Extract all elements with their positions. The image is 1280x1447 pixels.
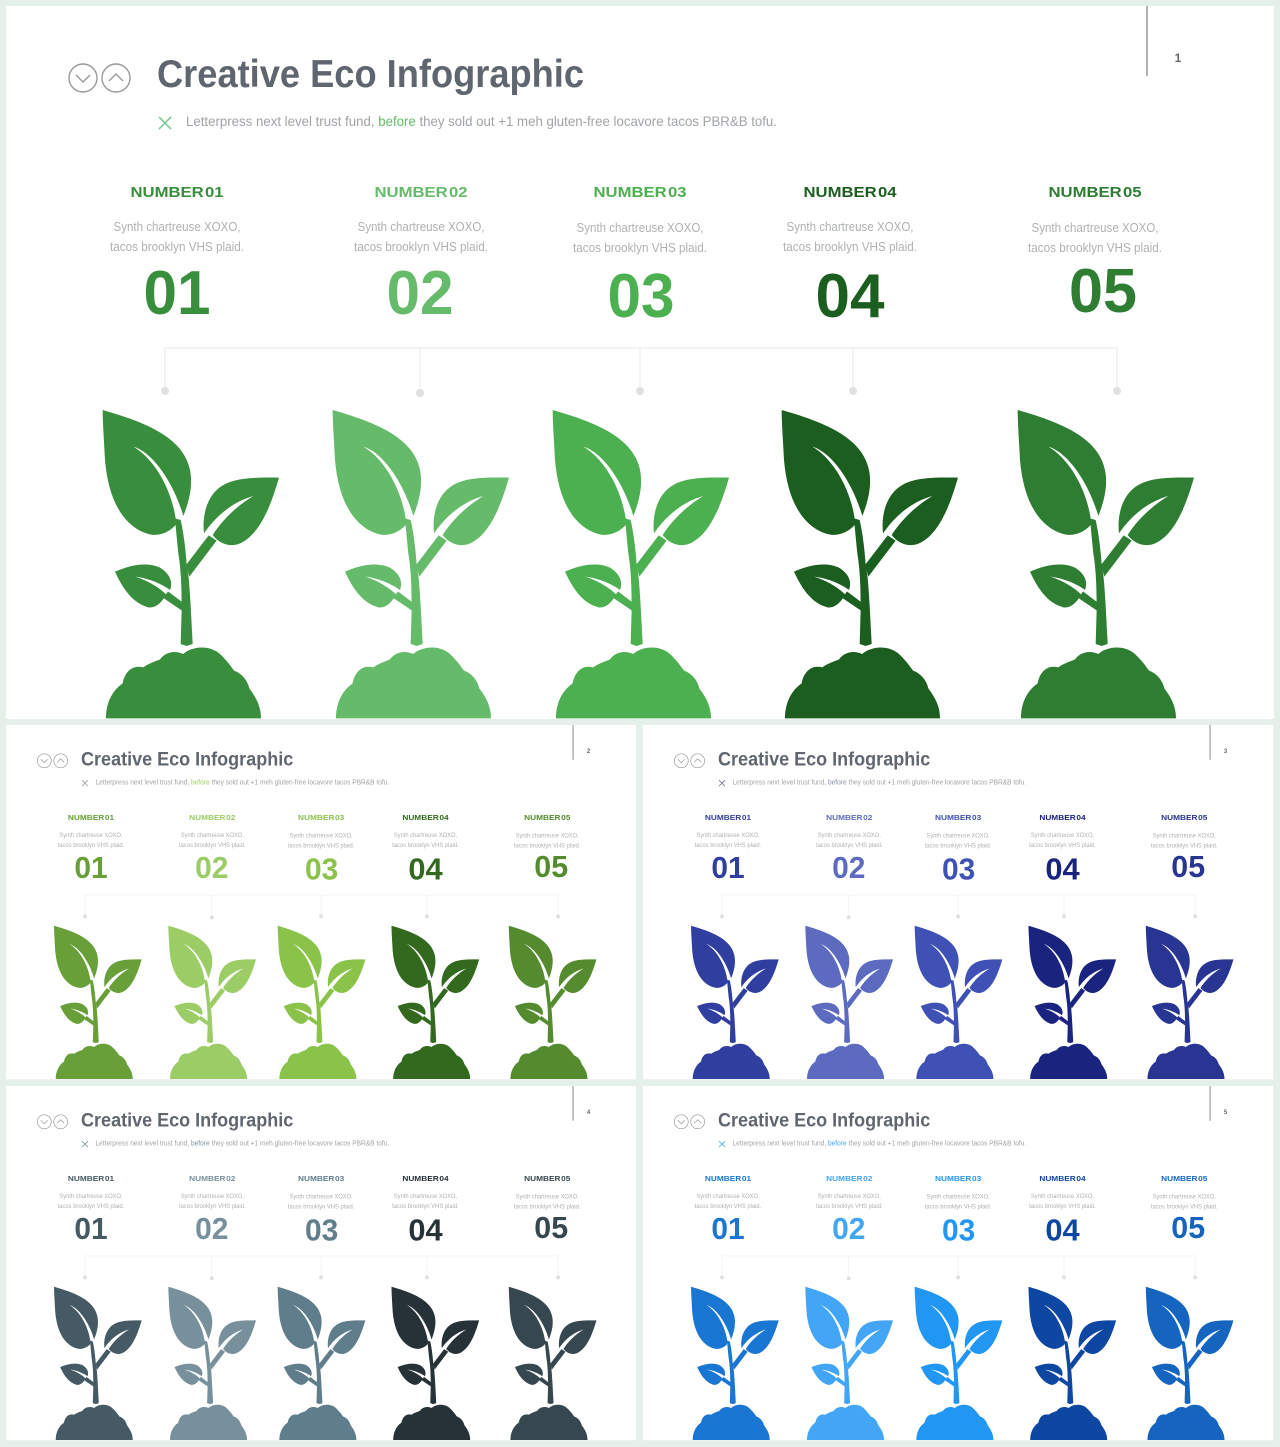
- column 4 text: NUMBER 04: [1039, 813, 1087, 822]
- column 2 text: NUMBER 02: [826, 813, 872, 822]
- column 3 text: NUMBER 03: [594, 184, 686, 201]
- column 5 text: Synth chartreuse XOXO,: [1153, 1193, 1216, 1200]
- column 4 text: NUMBER 04: [402, 813, 450, 822]
- panel: indigo slide: [643, 725, 1273, 1079]
- subtitle: Letterpress next level trust fund, before they sold out +1 meh gluten-free locavore tacos PBR&B tofu.: [186, 113, 777, 129]
- column 1 text: 01: [711, 1211, 745, 1246]
- column 2 text: 02: [195, 850, 228, 885]
- column 1 text: [695, 813, 762, 885]
- column 5 text: NUMBER 05: [1161, 1174, 1207, 1183]
- column 1 text: Synth chartreuse XOXO,: [114, 220, 240, 234]
- connector lines: [720, 895, 1197, 919]
- column 2 text: tacos brooklyn VHS plaid.: [816, 842, 883, 849]
- column 2 text: Synth chartreuse XOXO,: [181, 1193, 244, 1200]
- column 4 text: 04: [408, 852, 443, 887]
- column 4 text: 04: [816, 262, 885, 331]
- column 2 text: [816, 813, 883, 885]
- column 5 text: NUMBER 05: [1161, 813, 1207, 822]
- page number: 5: [1224, 1110, 1228, 1116]
- column 3 text: 03: [305, 1213, 338, 1248]
- column 4 text: 04: [1045, 1213, 1080, 1248]
- icon: chevron circles: [37, 754, 68, 768]
- column 1 text: tacos brooklyn VHS plaid.: [695, 842, 762, 849]
- page number divider: [572, 725, 574, 760]
- panel: blue slide: [643, 1086, 1273, 1440]
- column 2 text: [354, 187, 487, 314]
- column 3 text: [925, 813, 992, 887]
- column 1 text: [58, 815, 124, 878]
- column 2 text: tacos brooklyn VHS plaid.: [179, 1203, 246, 1210]
- icon: plant 1: [103, 410, 279, 718]
- icon: chevron circles: [37, 1115, 68, 1129]
- column 2 text: 02: [386, 259, 454, 328]
- column 1 text: NUMBER 01: [68, 813, 114, 822]
- column 4 text: 04: [408, 1213, 443, 1248]
- column 2 text: [179, 815, 245, 878]
- icon: plant 2: [805, 1287, 893, 1440]
- icon: plant 1: [54, 1287, 142, 1440]
- icon: plant 1: [54, 926, 142, 1079]
- page number divider: [1146, 6, 1148, 76]
- column 4 text: tacos brooklyn VHS plaid.: [1029, 842, 1096, 849]
- column 5 text: tacos brooklyn VHS plaid.: [514, 842, 581, 849]
- icon: plant 4: [392, 1287, 479, 1440]
- icon: cross mark: [719, 1141, 725, 1147]
- column 3 text: [573, 187, 706, 318]
- icon: chevron circles: [674, 754, 705, 768]
- icon: plant 1: [691, 926, 779, 1079]
- column 4 text: Synth chartreuse XOXO,: [394, 1193, 457, 1200]
- column 2 text: Synth chartreuse XOXO,: [818, 1193, 881, 1200]
- column 1 text: [58, 1174, 125, 1246]
- column 3 text: 03: [305, 852, 338, 887]
- icon: plant 2: [168, 926, 256, 1079]
- column 4 text: 04: [1045, 852, 1080, 887]
- column 4 text: NUMBER 04: [402, 1174, 450, 1183]
- column 3 text: Synth chartreuse XOXO,: [927, 832, 990, 839]
- page number: 3: [1224, 749, 1228, 755]
- column 4 text: [392, 1174, 459, 1248]
- column 1 text: 01: [711, 850, 745, 885]
- icon: chevron circles: [674, 1115, 705, 1129]
- column 5 text: 05: [534, 849, 568, 884]
- icon: cross mark: [719, 780, 725, 786]
- column 2 text: 02: [195, 1211, 228, 1246]
- icon: cross mark: [159, 117, 171, 129]
- column 5 text: 05: [534, 1210, 568, 1245]
- column 1 text: tacos brooklyn VHS plaid.: [695, 1203, 762, 1210]
- column 4 text: Synth chartreuse XOXO,: [786, 220, 914, 234]
- page number divider: [1209, 725, 1211, 760]
- icon: chevron circles: [69, 64, 130, 92]
- column 2 text: NUMBER 02: [189, 1174, 235, 1183]
- column 5 text: tacos brooklyn VHS plaid.: [1151, 842, 1218, 849]
- icon: plant 2: [333, 410, 509, 718]
- column 4 text: [783, 187, 916, 318]
- column 3 text: [288, 815, 354, 880]
- column 3 text: Synth chartreuse XOXO,: [927, 1193, 990, 1200]
- icon: cross mark: [82, 780, 88, 786]
- column 5 text: [514, 815, 580, 878]
- column 3 text: NUMBER 03: [298, 1174, 344, 1183]
- column 1 text: NUMBER 01: [68, 1174, 114, 1183]
- column 3 text: tacos brooklyn VHS plaid.: [925, 842, 992, 849]
- subtitle: Letterpress next level trust fund, before they sold out +1 meh gluten-free locavore tacos PBR&B tofu.: [732, 1141, 1026, 1148]
- icon: cross mark: [82, 1141, 88, 1147]
- column 4 text: NUMBER 04: [804, 184, 897, 201]
- page number: 2: [587, 749, 591, 755]
- icon: plant 5: [509, 1287, 596, 1440]
- column 5 text: Synth chartreuse XOXO,: [1032, 221, 1158, 235]
- icon: plant 5: [1146, 926, 1233, 1079]
- column 3 text: NUMBER 03: [935, 1174, 981, 1183]
- icon: plant 2: [805, 926, 893, 1079]
- column 2 text: Synth chartreuse XOXO,: [818, 832, 881, 839]
- column 4 text: tacos brooklyn VHS plaid.: [783, 240, 917, 254]
- column 5 text: [514, 1174, 581, 1245]
- column 2 text: Synth chartreuse XOXO,: [358, 220, 484, 234]
- column 5 text: tacos brooklyn VHS plaid.: [514, 1203, 581, 1210]
- panel: light green slide: [6, 725, 636, 1079]
- column 1 text: tacos brooklyn VHS plaid.: [110, 240, 244, 254]
- column 1 text: 01: [144, 259, 210, 328]
- column 4 text: Synth chartreuse XOXO,: [1031, 1193, 1094, 1200]
- column 1 text: Synth chartreuse XOXO,: [59, 1193, 123, 1200]
- column 4 text: tacos brooklyn VHS plaid.: [392, 842, 459, 849]
- column 1 text: tacos brooklyn VHS plaid.: [58, 1203, 125, 1210]
- subtitle: Letterpress next level trust fund, before they sold out +1 meh gluten-free locavore tacos PBR&B tofu.: [95, 1141, 389, 1148]
- icon: plant 1: [691, 1287, 779, 1440]
- column 2 text: 02: [832, 850, 865, 885]
- column 3 text: [288, 1174, 355, 1248]
- column 4 text: tacos brooklyn VHS plaid.: [392, 1203, 459, 1210]
- column 5 text: 05: [1069, 257, 1137, 326]
- column 1 text: Synth chartreuse XOXO,: [696, 832, 760, 839]
- column 5 text: Synth chartreuse XOXO,: [516, 1193, 579, 1200]
- column 4 text: [392, 815, 458, 880]
- column 1 text: NUMBER 01: [130, 184, 224, 201]
- column 3 text: 03: [942, 1213, 975, 1248]
- column 1 text: [695, 1174, 762, 1246]
- column 5 text: tacos brooklyn VHS plaid.: [1151, 1203, 1218, 1210]
- column 3 text: Synth chartreuse XOXO,: [576, 221, 704, 235]
- column 2 text: NUMBER 02: [189, 813, 235, 822]
- column 1 text: 01: [74, 850, 108, 885]
- page number: 1: [1175, 51, 1182, 65]
- column 2 text: tacos brooklyn VHS plaid.: [354, 240, 488, 254]
- column 2 text: 02: [832, 1211, 865, 1246]
- icon: plant 5: [509, 926, 596, 1079]
- column 4 text: [1029, 813, 1096, 887]
- column 5 text: [1151, 813, 1218, 884]
- icon: plant 5: [1146, 1287, 1233, 1440]
- column 1 text: tacos brooklyn VHS plaid.: [58, 842, 125, 849]
- icon: plant 3: [915, 1287, 1002, 1440]
- column 3 text: NUMBER 03: [298, 813, 344, 822]
- column 1 text: NUMBER 01: [705, 813, 751, 822]
- column 5 text: 05: [1171, 1210, 1205, 1245]
- column 5 text: Synth chartreuse XOXO,: [516, 832, 579, 839]
- column 3 text: 03: [608, 262, 674, 331]
- connector lines: [720, 1256, 1197, 1280]
- title: Creative Eco Infographic: [81, 748, 293, 770]
- panel: blue grey slide: [6, 1086, 636, 1440]
- column 4 text: [1029, 1174, 1096, 1248]
- column 3 text: Synth chartreuse XOXO,: [290, 832, 353, 839]
- column 4 text: Synth chartreuse XOXO,: [1031, 832, 1094, 839]
- icon: plant 4: [1029, 926, 1116, 1079]
- icon: plant 4: [782, 410, 958, 718]
- page number divider: [572, 1086, 574, 1121]
- icon: plant 5: [1018, 410, 1194, 718]
- column 5 text: [1151, 1174, 1218, 1245]
- column 5 text: NUMBER 05: [1048, 184, 1142, 201]
- icon: plant 4: [1029, 1287, 1116, 1440]
- column 1 text: Synth chartreuse XOXO,: [59, 832, 123, 839]
- page number divider: [1209, 1086, 1211, 1121]
- column 2 text: tacos brooklyn VHS plaid.: [179, 842, 246, 849]
- column 5 text: [1028, 187, 1161, 312]
- column 4 text: Synth chartreuse XOXO,: [394, 832, 457, 839]
- column 3 text: NUMBER 03: [935, 813, 981, 822]
- column 3 text: 03: [942, 852, 975, 887]
- column 3 text: [925, 1174, 992, 1248]
- column 3 text: tacos brooklyn VHS plaid.: [925, 1203, 992, 1210]
- icon: plant 3: [278, 926, 365, 1079]
- subtitle: Letterpress next level trust fund, before they sold out +1 meh gluten-free locavore tacos PBR&B tofu.: [732, 780, 1026, 787]
- column 3 text: tacos brooklyn VHS plaid.: [288, 842, 355, 849]
- icon: plant 3: [915, 926, 1002, 1079]
- column 5 text: Synth chartreuse XOXO,: [1153, 832, 1216, 839]
- subtitle: Letterpress next level trust fund, before they sold out +1 meh gluten-free locavore tacos PBR&B tofu.: [95, 780, 389, 787]
- column 1 text: 01: [74, 1211, 108, 1246]
- column 3 text: Synth chartreuse XOXO,: [290, 1193, 353, 1200]
- column 1 text: [110, 187, 243, 314]
- column 2 text: NUMBER 02: [374, 184, 468, 201]
- icon: plant 4: [392, 926, 479, 1079]
- column 5 text: 05: [1171, 849, 1205, 884]
- panel: main green slide: [6, 6, 1274, 719]
- column 1 text: Synth chartreuse XOXO,: [696, 1193, 760, 1200]
- column 3 text: tacos brooklyn VHS plaid.: [288, 1203, 355, 1210]
- column 2 text: Synth chartreuse XOXO,: [181, 832, 244, 839]
- icon: plant 3: [553, 410, 729, 718]
- icon: plant 3: [278, 1287, 365, 1440]
- column 2 text: [816, 1174, 883, 1246]
- page number: 4: [587, 1110, 591, 1116]
- column 3 text: tacos brooklyn VHS plaid.: [573, 241, 707, 255]
- column 1 text: NUMBER 01: [705, 1174, 751, 1183]
- column 5 text: NUMBER 05: [524, 1174, 570, 1183]
- column 5 text: tacos brooklyn VHS plaid.: [1028, 241, 1162, 255]
- connector lines: [83, 895, 560, 919]
- title: Creative Eco Infographic: [157, 53, 584, 96]
- column 5 text: NUMBER 05: [524, 813, 570, 822]
- connector lines: [83, 1256, 560, 1280]
- icon: plant 2: [168, 1287, 256, 1440]
- column 4 text: NUMBER 04: [1039, 1174, 1087, 1183]
- column 2 text: tacos brooklyn VHS plaid.: [816, 1203, 883, 1210]
- column 2 text: NUMBER 02: [826, 1174, 872, 1183]
- title: Creative Eco Infographic: [718, 748, 930, 770]
- title: Creative Eco Infographic: [718, 1109, 930, 1131]
- connector lines: [161, 348, 1121, 397]
- title: Creative Eco Infographic: [81, 1109, 293, 1131]
- column 4 text: tacos brooklyn VHS plaid.: [1029, 1203, 1096, 1210]
- column 2 text: [179, 1174, 246, 1246]
